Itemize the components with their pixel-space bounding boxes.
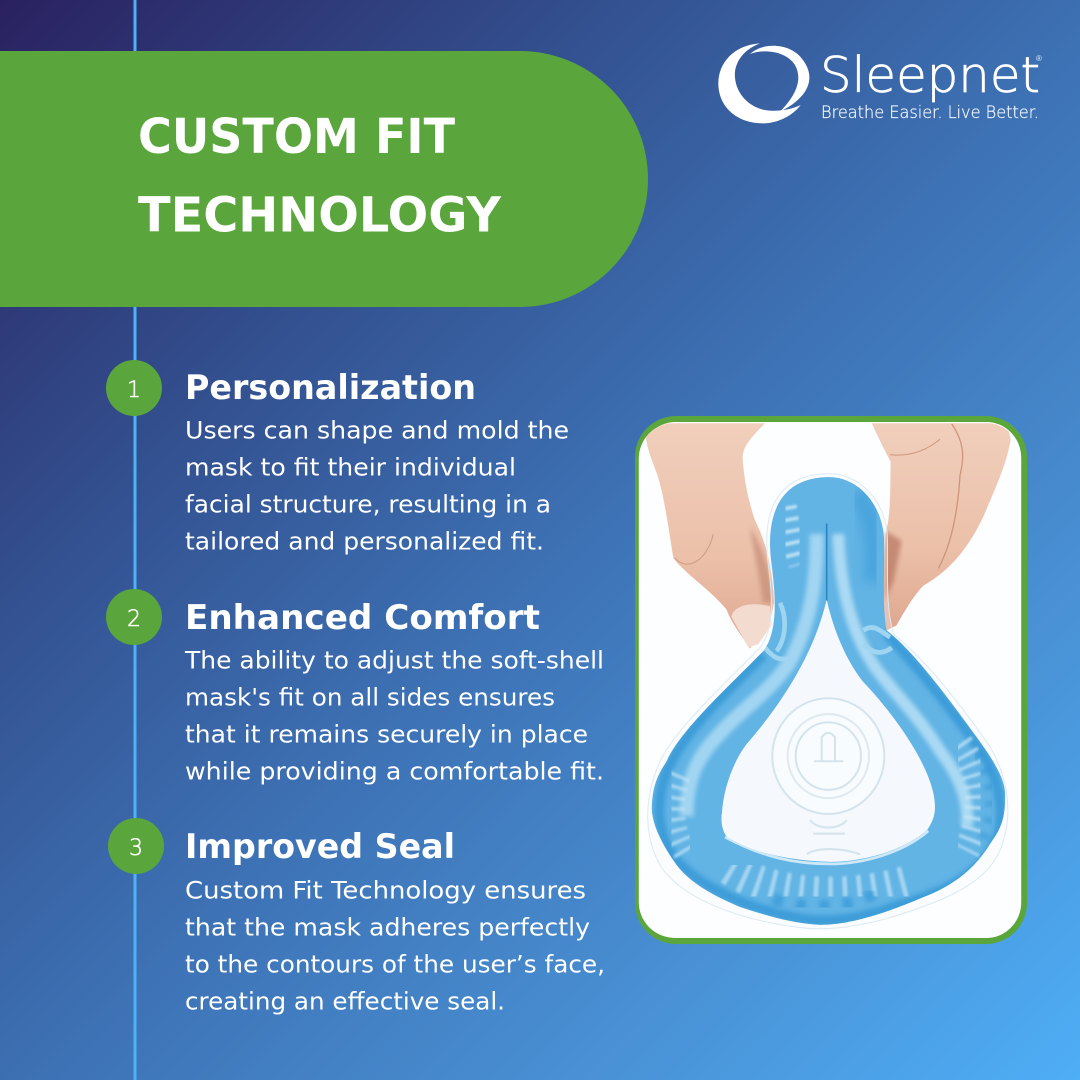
heading: Improved Seal [185, 827, 455, 867]
mask: blue gel tube [652, 477, 1005, 925]
step 2: enhanced comfort [106, 589, 604, 786]
body text: tailored and personalized fit. [185, 528, 544, 556]
mask: clear shell [648, 474, 1008, 929]
body text: mask to fit their individual [185, 454, 516, 482]
body text [185, 876, 605, 1016]
registered mark: ® [1036, 54, 1042, 63]
left hand [645, 423, 774, 648]
body text: mask's fit on all sides ensures [185, 684, 555, 712]
body text: while providing a comfortable fit. [185, 758, 604, 786]
step 1: personalization [106, 360, 569, 556]
title banner [0, 51, 648, 307]
wordmark: Sleepnet [820, 47, 1040, 104]
mask: inner clear panel [721, 599, 935, 862]
number badge 3 [108, 818, 164, 874]
tagline: Breathe Easier. Live Better. [821, 103, 1039, 122]
body text: creating an effective seal. [185, 988, 505, 1016]
number badge 2 [106, 589, 162, 645]
icon: crescent ring [718, 43, 809, 123]
illustration: hands flexing the blue gel mask [638, 423, 1022, 938]
logo: Sleepnet [718, 43, 1042, 123]
title text: TECHNOLOGY [138, 188, 502, 244]
heading: Enhanced Comfort [185, 598, 540, 638]
number badge 2: 2 [127, 607, 141, 632]
body text [184, 646, 604, 786]
heading: Personalization [185, 368, 476, 408]
body text: Users can shape and mold the [185, 416, 569, 444]
body text: that the mask adheres perfectly [185, 914, 590, 942]
photo frame [638, 419, 1024, 941]
body text: facial structure, resulting in a [185, 490, 551, 518]
number badge 1: 1 [127, 378, 141, 403]
body text: Custom Fit Technology ensures [185, 876, 586, 904]
number badge 1 [106, 360, 162, 416]
mask: centre valve [772, 698, 884, 854]
title text: CUSTOM FIT [138, 109, 455, 165]
body text: The ability to adjust the soft-shell [184, 646, 604, 674]
body text: that it remains securely in place [185, 720, 588, 748]
body text [185, 416, 569, 556]
title text [138, 109, 502, 244]
body text: to the contours of the user’s face, [185, 950, 605, 978]
right hand [872, 423, 1011, 630]
number badge 3: 3 [129, 836, 143, 861]
step 3: improved seal [108, 818, 605, 1016]
